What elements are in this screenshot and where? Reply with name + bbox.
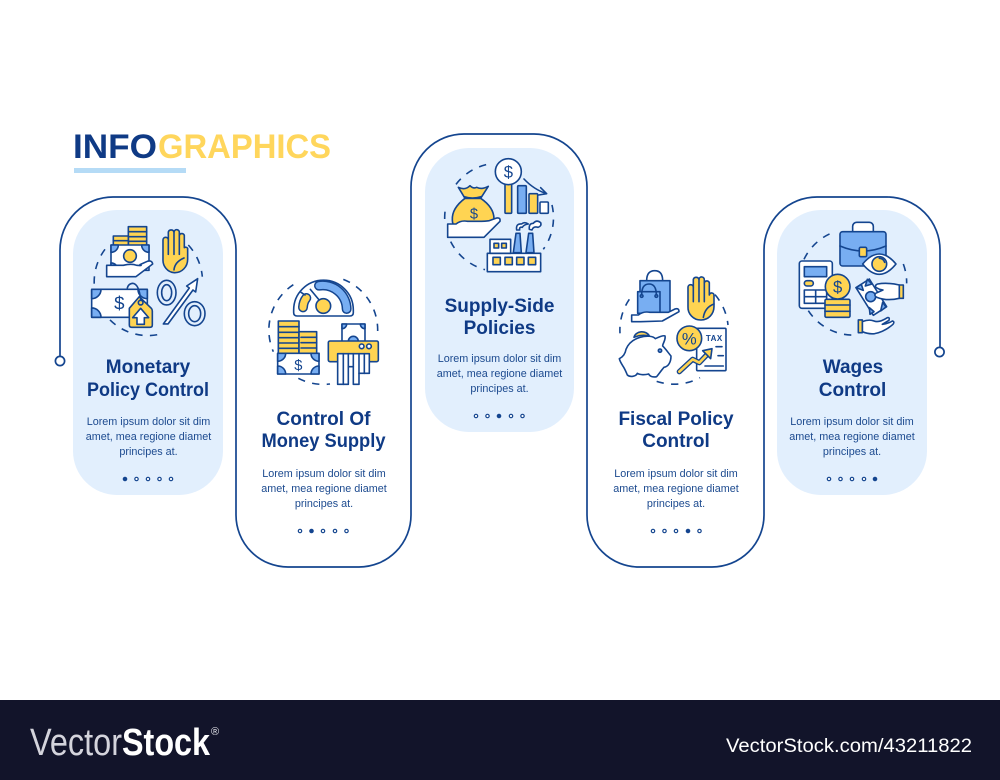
- panel: monetary policy control: Lorem ipsum dolor sit dim: [87, 416, 210, 428]
- footer bar: [0, 700, 1000, 780]
- panel: fiscal policy control: Lorem ipsum dolor sit dim: [614, 468, 738, 480]
- panel: fiscal policy control: Fiscal Policy: [618, 409, 734, 430]
- panel: fiscal policy control: principes at.: [647, 498, 705, 510]
- icon: wages: $: [833, 278, 842, 297]
- icon: fiscal policy: %: [682, 329, 697, 348]
- title: GRAPHICS: [158, 128, 331, 166]
- panel: monetary policy control: amet, mea regione diamet: [86, 431, 211, 443]
- panel: wages control: amet, mea regione diamet: [789, 431, 915, 443]
- title: [73, 128, 331, 166]
- icon: money supply: [269, 279, 378, 384]
- title: INFO: [73, 128, 157, 166]
- panel: control of money supply: Money Supply: [262, 431, 386, 452]
- footer bar: ®: [211, 726, 219, 738]
- title underline: [74, 168, 186, 173]
- icon: supply side: $: [504, 163, 513, 182]
- footer bar: VectorStock.com/43211822: [726, 736, 972, 757]
- icon: supply side: $: [470, 207, 478, 223]
- panel: supply-side policies: Lorem ipsum dolor sit dim: [438, 353, 561, 365]
- icon: supply side: [445, 159, 553, 272]
- panel: wages control: Control: [819, 380, 886, 401]
- icon: fiscal policy: [619, 271, 728, 384]
- footer bar: Stock: [122, 722, 211, 764]
- panel: monetary policy control: Monetary: [106, 357, 191, 378]
- panel: wages control: Lorem ipsum dolor sit dim: [790, 416, 914, 428]
- icon: money supply: $: [294, 358, 302, 374]
- panel: control of money supply: Lorem ipsum dolor sit dim: [262, 468, 386, 480]
- panel: monetary policy control: [73, 210, 223, 495]
- panel: fiscal policy control: [613, 271, 739, 533]
- icon: wages: [799, 222, 907, 335]
- icon: monetary policy: $: [114, 292, 125, 313]
- panel: monetary policy control: Policy Control: [87, 380, 209, 401]
- panel: wages control: principes at.: [823, 446, 881, 458]
- panel: control of money supply: amet, mea regione diamet: [261, 483, 387, 495]
- panel: wages control: [777, 210, 927, 495]
- panel: supply-side policies: Supply-Side: [445, 296, 554, 317]
- panel: control of money supply: principes at.: [295, 498, 353, 510]
- icon: monetary policy: [92, 227, 205, 336]
- panel: wages control: Wages: [823, 357, 883, 378]
- panel: fiscal policy control: amet, mea regione diamet: [613, 483, 739, 495]
- panel: supply-side policies: [425, 148, 574, 432]
- panel: monetary policy control: principes at.: [119, 446, 178, 458]
- panel: fiscal policy control: Control: [642, 431, 710, 452]
- panel: supply-side policies: Policies: [464, 318, 535, 339]
- panel: supply-side policies: principes at.: [470, 383, 529, 395]
- panel: control of money supply: Control Of: [277, 409, 371, 430]
- connecting outline: [55, 134, 944, 567]
- panel: control of money supply: [261, 279, 387, 533]
- icon: fiscal policy: TAX: [706, 334, 723, 343]
- footer bar: Vector: [30, 722, 122, 764]
- panel: supply-side policies: amet, mea regione diamet: [437, 368, 562, 380]
